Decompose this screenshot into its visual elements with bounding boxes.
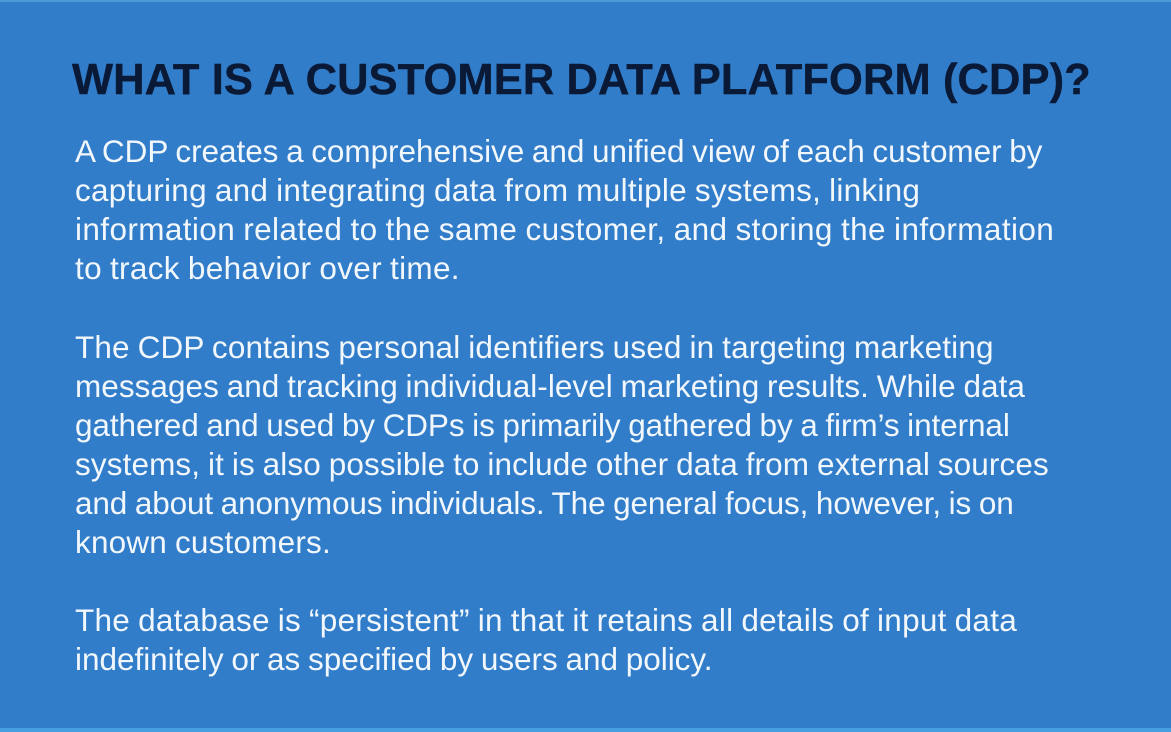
text block: paragraph 3: indefinitely or as specified by users and policy. bbox=[75, 641, 713, 677]
title: WHAT IS A CUSTOMER DATA PLATFORM (CDP)? bbox=[72, 56, 1091, 104]
text block: paragraph 2: known customers. bbox=[75, 524, 331, 560]
text block: paragraph 3: The database is “persistent” in that it retains all details of input data bbox=[75, 602, 1017, 638]
text block: paragraph 1 bbox=[75, 133, 1054, 286]
text block: paragraph 1: A CDP creates a comprehensive and unified view of each customer by bbox=[75, 133, 1042, 169]
text block: paragraph 2: The CDP contains personal identifiers used in targeting marketing bbox=[75, 329, 994, 365]
text block: paragraph 1: information related to the same customer, and storing the information bbox=[75, 211, 1054, 247]
text block: paragraph 2 bbox=[75, 329, 1049, 560]
text block: paragraph 1: capturing and integrating data from multiple systems, linking bbox=[75, 172, 920, 208]
text block: paragraph 2: messages and tracking individual-level marketing results. While data bbox=[75, 368, 1025, 404]
text block: paragraph 1: to track behavior over time. bbox=[75, 250, 460, 286]
text block: paragraph 2: gathered and used by CDPs is primarily gathered by a firm’s internal bbox=[75, 407, 1010, 443]
text block: paragraph 2: and about anonymous individuals. The general focus, however, is on bbox=[75, 485, 1014, 521]
text block: paragraph 2: systems, it is also possible to include other data from external sources bbox=[75, 446, 1049, 482]
text block: paragraph 3 bbox=[75, 602, 1017, 677]
